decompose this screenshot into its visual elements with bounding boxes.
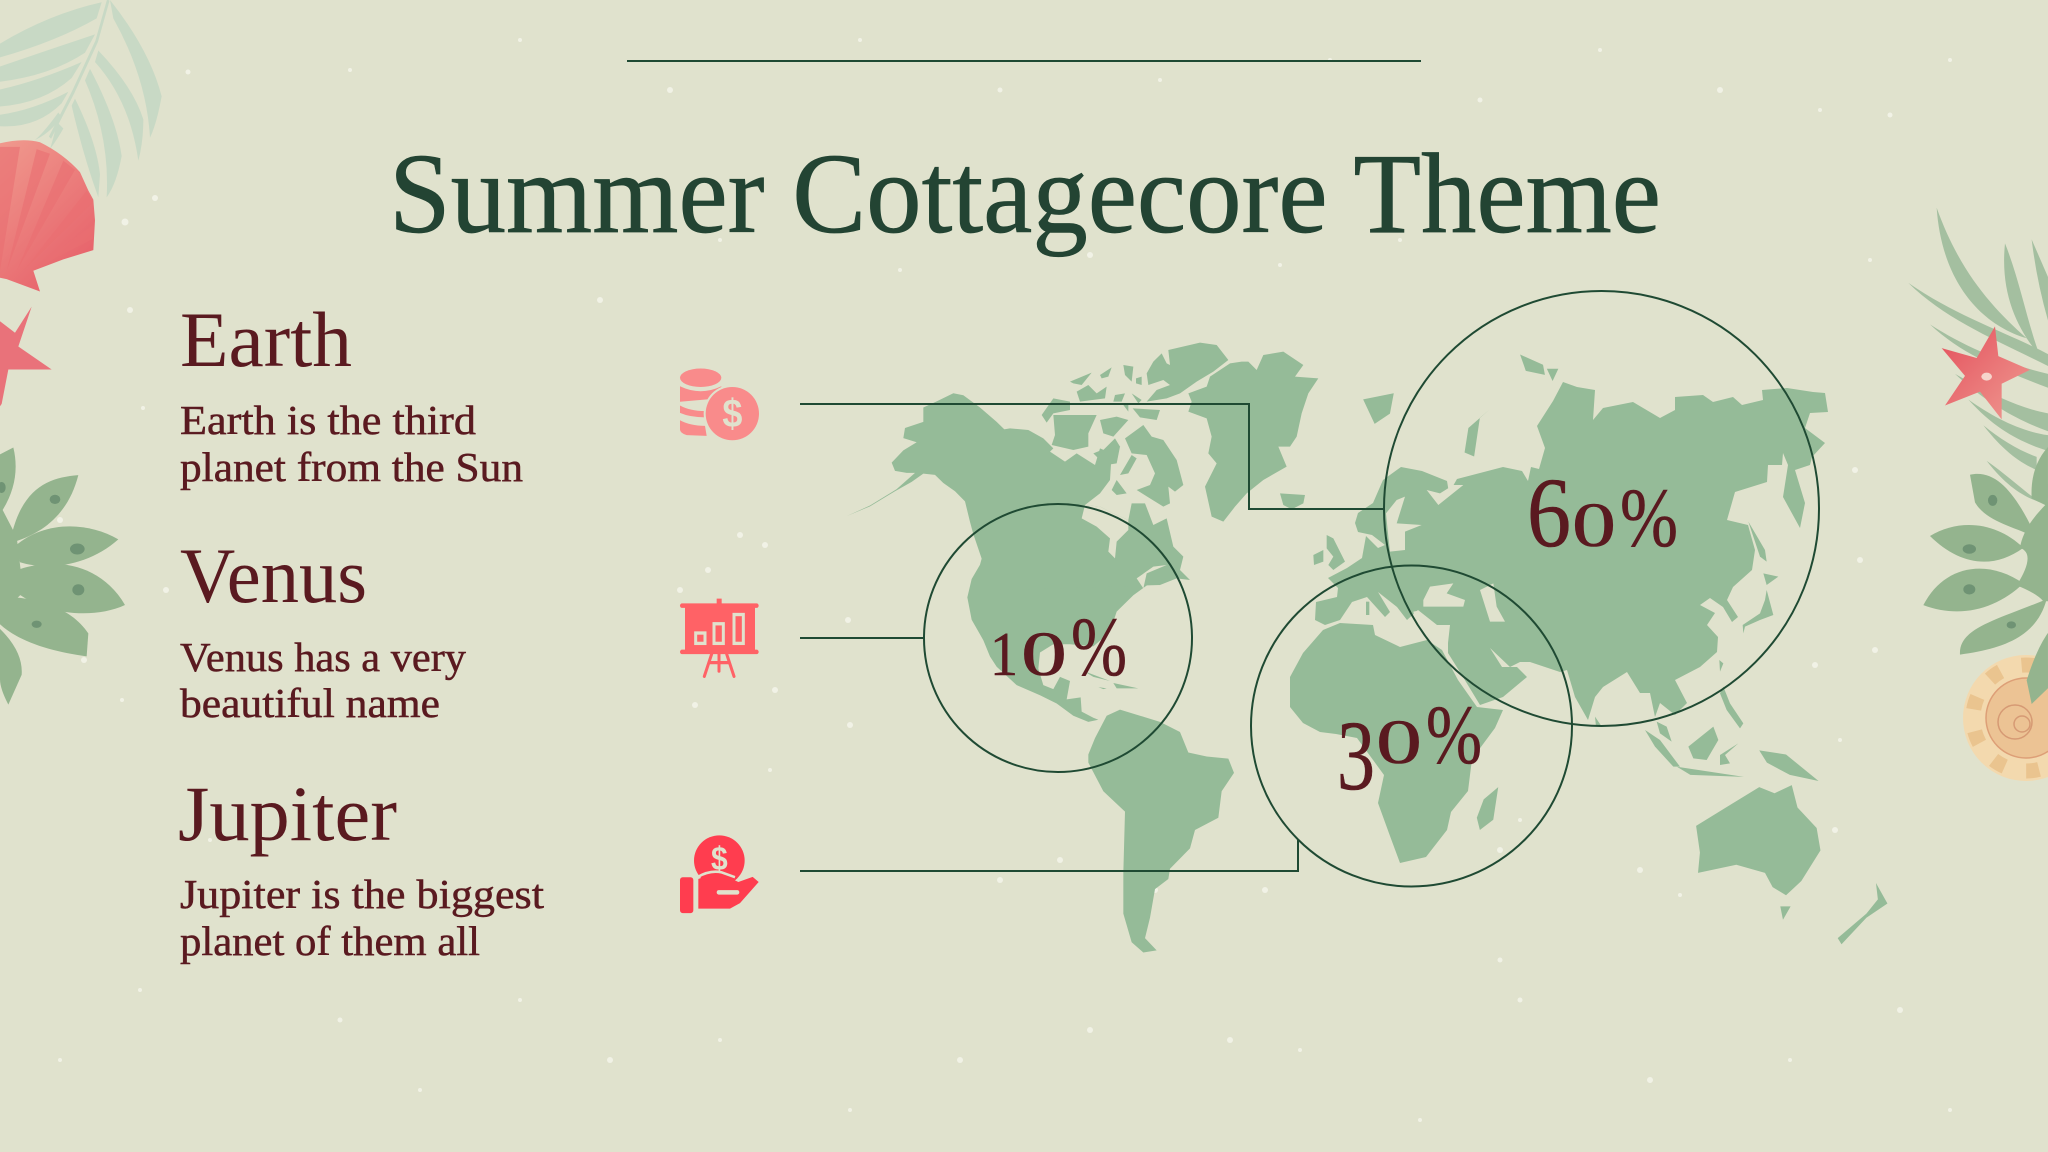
icon: coins with dollar: $ [722, 392, 742, 436]
callout circle: 10% [924, 504, 1192, 772]
top rule [627, 60, 1421, 62]
text block: Earth: Earth [180, 296, 352, 383]
text block: Jupiter: planet of them all [180, 918, 480, 964]
decoration: left monstera leaf [0, 448, 125, 705]
callout circle: 30%: % [1426, 689, 1482, 782]
callout circle: 60% [1384, 291, 1819, 726]
title: Summer Cottagecore Theme [389, 130, 1661, 257]
world map [847, 343, 1887, 952]
text block: Earth: Earth is the third [180, 397, 476, 443]
text block: Earth: planet from the Sun [180, 444, 523, 490]
text block: Jupiter: Jupiter is the biggest [180, 871, 545, 917]
text block: Venus [180, 532, 467, 726]
icon: hand holding coin: $ [711, 839, 728, 877]
map: Arctic Russia and Oceania [1363, 354, 1887, 944]
decoration: left scallop shell [0, 140, 95, 291]
text block: Venus: Venus has a very [180, 634, 467, 680]
text block: Jupiter: Jupiter [178, 770, 397, 857]
icon: coins with dollar [680, 368, 761, 442]
icon: hand holding coin [680, 835, 759, 913]
callout circle: 60%: 0 [1572, 492, 1616, 560]
decoration: left starfish [0, 307, 52, 406]
text block: Earth [180, 296, 523, 490]
map: Canada, Arctic islands and Greenland [1000, 343, 1318, 590]
decoration: right monstera leaf [1923, 447, 2048, 704]
callout circle: 30%: 0 [1376, 709, 1422, 777]
callout circle: 10%: 1 [990, 621, 1018, 689]
text block: Jupiter [178, 770, 545, 964]
decoration: right seashell [1963, 655, 2048, 781]
map: Eurasia [1315, 382, 1828, 720]
decoration: top-left palm leaf [0, 0, 162, 197]
callout circle: 60%: 6 [1527, 457, 1571, 568]
callout circle: 10%: 0 [1021, 621, 1067, 689]
map: inland seas [1386, 485, 1505, 623]
connector lines [800, 404, 1384, 871]
callout circle: 60%: % [1620, 472, 1678, 565]
map: Americas [847, 393, 1234, 952]
text block: Venus: beautiful name [180, 680, 440, 726]
callout circle: 30%: 3 [1337, 700, 1375, 811]
map: Africa [1290, 623, 1503, 863]
callout circle: 10%: % [1071, 601, 1127, 694]
decoration: right starfish [1942, 326, 2030, 419]
icon: presentation board [680, 599, 759, 676]
text block: Venus: Venus [180, 532, 367, 619]
callout circle: 30% [1251, 566, 1572, 886]
map: European islands [1313, 535, 1369, 615]
decoration: right palm leaf [1908, 208, 2048, 502]
map: East Asian islands [1595, 522, 1778, 767]
